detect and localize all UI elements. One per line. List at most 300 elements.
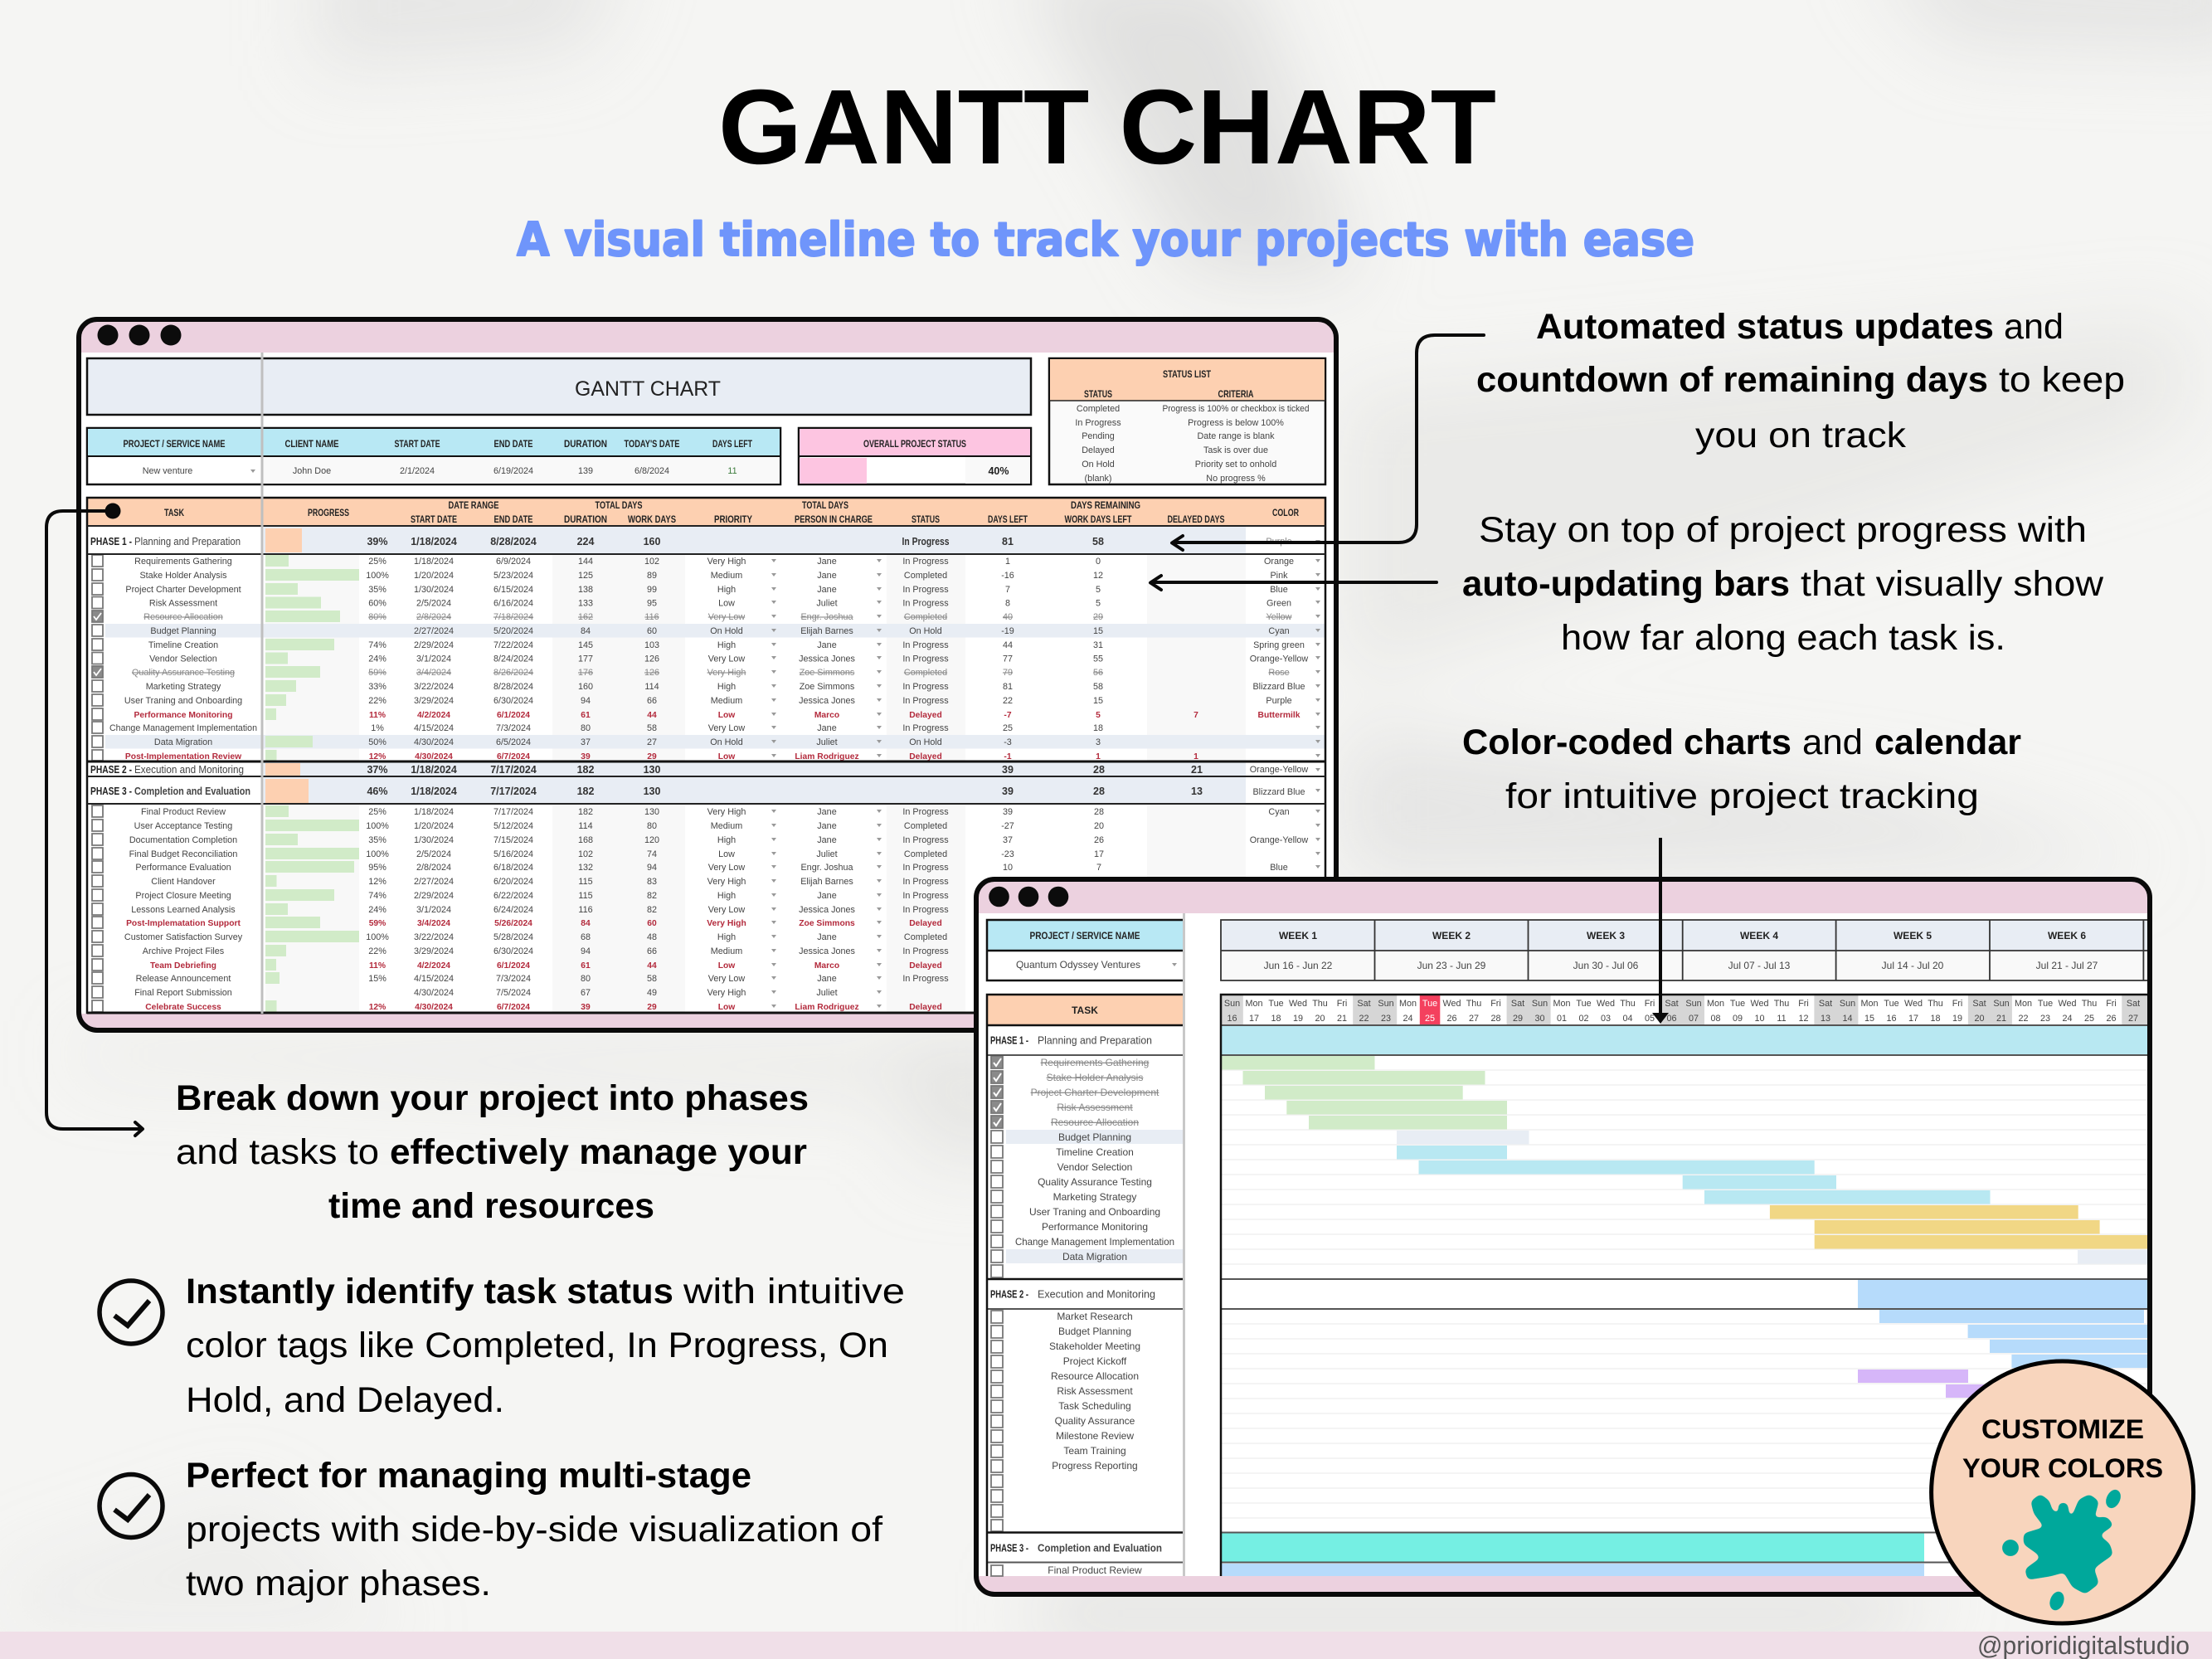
phase 1 task rows: 7/3/2024 — [496, 723, 531, 733]
phase 1 task rows: 103 — [644, 640, 659, 650]
day calendar header: Fri — [1490, 999, 1501, 1009]
phase 3 task rows: 100% — [366, 849, 389, 859]
phase 1 task rows: 50% — [368, 737, 386, 747]
phase 1 task rows: 100% — [366, 571, 389, 581]
table header row: DAYS REMAINING — [1071, 501, 1140, 511]
task list: Final Product Review — [1048, 1564, 1142, 1576]
text block: phases callout: Break down your project into phases — [176, 1078, 809, 1118]
phase 1 task rows: 22 — [1003, 696, 1013, 706]
phase 1 task rows: 27 — [647, 737, 657, 747]
day calendar header: 07 — [1689, 1014, 1699, 1024]
day calendar header: 20 — [1974, 1014, 1985, 1024]
week headers: WEEK 5 — [1894, 930, 1932, 941]
text block: color coded callout — [1462, 722, 2021, 816]
status list legend: Pending — [1082, 431, 1115, 441]
phase 2 summary row — [90, 762, 1308, 776]
day calendar header: Tue — [1422, 999, 1437, 1009]
day calendar header: Wed — [1442, 999, 1461, 1009]
day calendar header: 06 — [1666, 1014, 1677, 1024]
badge: customize your colors: YOUR COLORS — [1962, 1453, 2163, 1483]
phase 1 task rows: 114 — [644, 682, 659, 692]
project name box — [987, 920, 1183, 980]
phase 3 task rows: Final Report Submission — [134, 988, 232, 998]
phase 1 task rows: 4/15/2024 — [414, 723, 454, 733]
phase 1 task rows: Very Low — [708, 723, 745, 733]
phase 3 task rows: Release Announcement — [136, 974, 231, 984]
phase 3 task rows: 114 — [578, 821, 593, 831]
phase 3 task rows: 6/30/2024 — [493, 946, 533, 956]
phase 1 task rows: Low — [718, 599, 735, 609]
phase 1 task rows: 1 — [1005, 557, 1010, 567]
phase 3 task rows: Jane — [817, 821, 837, 831]
phase 1 task rows: Vendor Selection — [149, 654, 217, 664]
phase 1 task rows: Zoe Simmons — [800, 668, 855, 678]
day calendar header: 11 — [1777, 1014, 1787, 1024]
status list legend: In Progress — [1075, 418, 1121, 428]
day calendar header: Wed — [2058, 999, 2077, 1009]
phase 1 task rows: 1% — [371, 723, 384, 733]
phase 3 task rows: In Progress — [902, 974, 949, 984]
table header row: DATE RANGE — [448, 501, 499, 511]
phase 3 task rows: Jane — [817, 807, 837, 817]
phase 3 task rows: 1/20/2024 — [414, 821, 454, 831]
phase 3 task rows: 94 — [647, 863, 657, 873]
day calendar header: 29 — [1513, 1014, 1523, 1024]
phase 3 task rows: 66 — [647, 946, 657, 956]
text block: phases callout: time and resources — [328, 1186, 654, 1226]
phase 1 task rows: 84 — [581, 626, 591, 636]
phase 3 task rows: 6/22/2024 — [493, 891, 533, 901]
phase 3 task rows: 100% — [366, 932, 389, 942]
phase 1 task rows: 126 — [644, 668, 659, 678]
text block: color coded callout: for intuitive project tracking — [1505, 776, 1979, 816]
phase 2 summary row: 130 — [644, 764, 660, 776]
phase 3 task rows: Jane — [817, 891, 837, 901]
phase 3 task rows: Final Budget Reconciliation — [129, 849, 237, 859]
phase 3 task rows: Very High — [707, 877, 746, 887]
phase 3 task rows: Final Product Review — [141, 807, 226, 817]
day calendar header: 17 — [1249, 1014, 1259, 1024]
phase 1 task rows: 1/30/2024 — [414, 585, 454, 595]
phase 1 task rows: In Progress — [902, 682, 949, 692]
status list legend: STATUS — [1084, 390, 1112, 400]
phase 1 task rows: 6/1/2024 — [497, 711, 530, 720]
phase 1 task rows: 126 — [644, 654, 659, 664]
phase 1 task rows: Engr. Joshua — [800, 612, 853, 622]
phase 3 task rows: In Progress — [902, 835, 949, 845]
table header row: WORK DAYS — [628, 515, 676, 525]
timeline section rules — [1221, 1025, 2148, 1563]
phase 1 summary row: Planning and Preparation — [134, 536, 241, 547]
project info table: START DATE — [395, 440, 440, 450]
phase 1 task rows: 60% — [368, 599, 386, 609]
table header row: DAYS LEFT — [988, 515, 1028, 525]
text block: task status bullet: Instantly identify task status — [186, 1272, 673, 1311]
phase 1 task rows: 40 — [1003, 612, 1013, 622]
dropdown arrows — [771, 559, 1320, 1008]
status list legend: On Hold — [1082, 460, 1115, 469]
day calendar header: 18 — [1930, 1014, 1941, 1024]
table column shading — [265, 554, 1246, 1013]
day calendar header: Mon — [1245, 999, 1263, 1009]
phase 2 summary row: 182 — [577, 764, 594, 776]
phase 3 task rows: 4/30/2024 — [414, 988, 454, 998]
phase 3 task rows: Engr. Joshua — [800, 863, 853, 873]
phase 1 task rows: 3/29/2024 — [414, 696, 454, 706]
phase 1 task rows: Delayed — [909, 752, 942, 761]
phase 1 task rows: Low — [718, 711, 736, 720]
phase 1 task rows: 6/15/2024 — [493, 585, 533, 595]
phase 3 task rows: 2/27/2024 — [414, 877, 454, 887]
phase 1 summary row: 39% — [367, 536, 388, 547]
text block: progress bars callout — [1462, 510, 2104, 658]
phase 3 task rows: Lessons Learned Analysis — [131, 905, 236, 915]
phase 3 task rows: 115 — [578, 877, 593, 887]
task list: Planning and Preparation — [1038, 1034, 1152, 1047]
week headers: WEEK 2 — [1432, 930, 1471, 941]
phase 1 task rows: Jane — [817, 640, 837, 650]
phase 3 task rows: 115 — [578, 891, 593, 901]
day calendar header: 19 — [1293, 1014, 1303, 1024]
week headers: Jun 16 - Jun 22 — [1264, 960, 1333, 971]
phase 1 task rows: 94 — [581, 696, 591, 706]
phase 3 task rows: Project Closure Meeting — [135, 891, 231, 901]
task list: TASK — [1072, 1005, 1098, 1016]
phase 1 gantt bars — [1222, 1056, 2148, 1264]
phase 3 task rows: 44 — [647, 961, 657, 971]
text block: progress bars callout: Stay on top of project progress with — [1479, 510, 2087, 550]
phase 3 task rows: In Progress — [902, 905, 949, 915]
day calendar header: Sun — [1532, 999, 1548, 1009]
phase 1 task rows: 2/8/2024 — [416, 612, 451, 622]
phase 3 task rows: 102 — [578, 849, 593, 859]
phase 1 task rows: 5 — [1096, 585, 1101, 595]
week headers — [1221, 920, 2148, 980]
phase 2 summary row: PHASE 2 - — [90, 764, 132, 776]
phase 3 task rows: Delayed — [909, 961, 942, 971]
phase 1 task rows: Requirements Gathering — [134, 557, 232, 567]
phase 3 task rows: Archive Project Files — [143, 946, 225, 956]
phase 1 task rows: High — [717, 682, 736, 692]
phase 3 task rows: Cyan — [1268, 807, 1290, 817]
phase 3 task rows: Very Low — [708, 863, 745, 873]
phase 1 task rows: 0 — [1096, 557, 1101, 567]
phase 3 task rows: 12% — [369, 1003, 386, 1012]
phase 3 summary row: Completion and Evaluation — [134, 786, 250, 797]
project info table: 6/19/2024 — [493, 466, 533, 476]
day calendar header: Wed — [1904, 999, 1923, 1009]
phase 2 gantt bars — [1858, 1279, 2148, 1398]
day calendar header: 27 — [1469, 1014, 1479, 1024]
week headers: Jul 21 - Jul 27 — [2036, 960, 2098, 971]
phase 1 task rows — [105, 555, 1325, 761]
day calendar header: 15 — [1864, 1014, 1874, 1024]
phase 1 task rows: -16 — [1001, 571, 1014, 581]
phase 3 task rows: Completed — [904, 849, 947, 859]
project info table: DURATION — [564, 440, 607, 450]
phase 3 task rows: Very Low — [708, 905, 745, 915]
day calendar header: 16 — [1227, 1014, 1237, 1024]
phase 3 task rows: 95% — [368, 863, 386, 873]
table header row: DURATION — [564, 515, 607, 525]
phase 3 task rows: 2/29/2024 — [414, 891, 454, 901]
text block: task status bullet: Hold, and Delayed. — [186, 1380, 504, 1420]
sheet title box: GANTT CHART — [575, 377, 721, 401]
phase 3 task rows: High — [717, 932, 736, 942]
window frame outline — [79, 319, 1336, 1030]
task list: Execution and Monitoring — [1038, 1287, 1155, 1301]
phase 1 task rows: 6/5/2024 — [496, 737, 531, 747]
phase 3 task rows: 2/8/2024 — [416, 863, 451, 873]
phase 3 task rows: 37 — [1003, 835, 1013, 845]
project info table: 2/1/2024 — [400, 466, 435, 476]
phase 3 task rows: 3/22/2024 — [414, 932, 454, 942]
week headers: WEEK 1 — [1279, 930, 1317, 941]
status list legend: Task is over due — [1203, 445, 1268, 455]
status list legend: Date range is blank — [1197, 431, 1275, 441]
project info table: DAYS LEFT — [712, 440, 752, 450]
arrow: phases callout to task column — [46, 503, 143, 1136]
task list: Risk Assessment — [1057, 1385, 1133, 1397]
phase 3 task rows: 39 — [581, 1003, 591, 1012]
phase 1 task rows: 58 — [647, 723, 657, 733]
phase 3 task rows: 82 — [647, 905, 657, 915]
text block: task status bullet: with intuitive — [683, 1272, 905, 1311]
task list: Team Training — [1063, 1445, 1126, 1457]
phase 3 task rows: Blue — [1270, 863, 1288, 873]
phase 3 task rows: Jessica Jones — [799, 946, 856, 956]
phase 1 task rows: In Progress — [902, 557, 949, 567]
phase 1 task rows: 177 — [578, 654, 593, 664]
phase 3 task rows: 74% — [368, 891, 386, 901]
phase 1 task rows: Cyan — [1268, 626, 1290, 636]
phase 3 task rows: 2/5/2024 — [416, 849, 451, 859]
phase 3 task rows: User Acceptance Testing — [134, 821, 232, 831]
text block: multi-stage bullet: Perfect for managing multi-stage — [186, 1456, 751, 1496]
phase 1 task rows: Orange — [1264, 557, 1294, 567]
phase 1 task rows: 24% — [368, 654, 386, 664]
phase 1 task rows: User Traning and Onboarding — [124, 696, 242, 706]
phase 1 task rows: Marco — [814, 711, 839, 720]
phase 1 task rows: 2/27/2024 — [414, 626, 454, 636]
status list legend: (blank) — [1084, 474, 1112, 484]
phase 1 task rows: 6/16/2024 — [493, 599, 533, 609]
phase 3 task rows: In Progress — [902, 946, 949, 956]
arrow: calendar callout to day header — [1652, 838, 1669, 1024]
phase 1 task rows: 3/4/2024 — [416, 668, 451, 678]
gantt timeline row lines — [1221, 1070, 2148, 1518]
phase 1 task rows: Resource Allocation — [143, 612, 223, 622]
phase 1 task rows: 61 — [581, 711, 591, 720]
day calendar header: Fri — [1337, 999, 1347, 1009]
freeze pane divider — [1183, 913, 1185, 1576]
phase 1 summary row: Purple — [1266, 537, 1292, 547]
phase 3 task rows: Juliet — [816, 988, 838, 998]
week headers: Jul 14 - Jul 20 — [1882, 960, 1944, 971]
phase 3 task rows: 11% — [369, 961, 386, 971]
text block: phases callout: effectively manage your — [390, 1132, 807, 1172]
phase 1 task rows: Low — [718, 752, 736, 761]
phase 1 task rows: Medium — [711, 571, 742, 581]
day calendar header: 19 — [1952, 1014, 1962, 1024]
phase 3 task rows: Post-Implematation Support — [126, 919, 241, 928]
phase 1 summary row: 160 — [644, 536, 660, 547]
task list: Task Scheduling — [1058, 1400, 1131, 1412]
phase 3 task rows: Orange-Yellow — [1250, 835, 1308, 845]
phase 1 task rows: 1/18/2024 — [414, 557, 454, 567]
phase 2 summary row: 28 — [1093, 764, 1105, 776]
phase 1 task rows: Quality Assurance Testing — [132, 668, 235, 678]
phase 3 task rows: 7/5/2024 — [496, 988, 531, 998]
day calendar header: 25 — [2084, 1014, 2094, 1024]
day calendar header: 12 — [1798, 1014, 1809, 1024]
freeze pane divider — [260, 353, 264, 1014]
phase 1 task rows: 138 — [578, 585, 593, 595]
day calendar header: 24 — [1403, 1014, 1413, 1024]
phase 3 gantt bars — [1221, 1533, 1924, 1576]
phase 1 task rows: 7/22/2024 — [493, 640, 533, 650]
phase 3 task rows: Jane — [817, 932, 837, 942]
phase 3 task rows: 12% — [368, 877, 386, 887]
phase 1 task rows: 162 — [578, 612, 593, 622]
overall project status — [799, 428, 1031, 484]
phase 1 task rows: 116 — [644, 612, 659, 622]
phase 2 summary row: Orange-Yellow — [1250, 765, 1308, 775]
phase 3 task rows: 80 — [581, 974, 591, 984]
task list: Project Kickoff — [1063, 1355, 1127, 1367]
day calendar header: Wed — [1750, 999, 1769, 1009]
phase 1 task rows: Very High — [707, 557, 746, 567]
phase 1 task rows: 29 — [1093, 612, 1103, 622]
phase 3 task rows: 7/17/2024 — [493, 807, 533, 817]
text block: automated status callout: you on track — [1695, 416, 1907, 455]
day calendar header: 25 — [1425, 1014, 1435, 1024]
status list legend: Progress is below 100% — [1188, 418, 1284, 428]
badge: customize your colors: CUSTOMIZE — [1981, 1414, 2144, 1444]
phase 3 task rows: 6/7/2024 — [497, 1003, 530, 1012]
task list: Milestone Review — [1056, 1430, 1134, 1442]
phase 1 task rows: In Progress — [902, 723, 949, 733]
phase 3 task rows: 28 — [1094, 807, 1104, 817]
phase 3 task rows: Jane — [817, 974, 837, 984]
phase 1 task rows: 95 — [647, 599, 657, 609]
day calendar header: Fri — [1645, 999, 1655, 1009]
phase 3 task rows: 3/29/2024 — [414, 946, 454, 956]
phase 3 task rows: 3/1/2024 — [416, 905, 451, 915]
task list: Data Migration — [1062, 1251, 1127, 1262]
text block: progress bars callout: how far along each task is. — [1561, 618, 2005, 658]
phase 1 task rows: Zoe Simmons — [800, 682, 855, 692]
phase 1 task rows: Performance Monitoring — [134, 711, 232, 720]
phase 3 summary row: 46% — [367, 786, 388, 797]
task list: Resource Allocation — [1051, 1117, 1139, 1128]
day calendar header: Thu — [1620, 999, 1636, 1009]
table header row: TOTAL DAYS — [802, 501, 848, 511]
day calendar header: 21 — [1337, 1014, 1347, 1024]
table header row: TASK — [164, 508, 185, 518]
table header row: STATUS — [912, 515, 940, 525]
phase 3 task rows: In Progress — [902, 877, 949, 887]
phase 3 task rows: 68 — [581, 932, 591, 942]
phase 3 task rows: Completed — [904, 932, 947, 942]
phase 1 task rows: 80% — [368, 612, 386, 622]
phase 3 task rows: 48 — [647, 932, 657, 942]
day calendar header — [1221, 995, 2148, 1025]
day calendar header: Mon — [1553, 999, 1571, 1009]
phase 1 task rows: 1 — [1096, 752, 1101, 761]
phase 3 task rows: 1/18/2024 — [414, 807, 454, 817]
day calendar header: Mon — [1399, 999, 1417, 1009]
phase 1 task rows: 31 — [1093, 640, 1103, 650]
phase 1 task rows: Jane — [817, 585, 837, 595]
phase 1 task rows: Yellow — [1266, 612, 1292, 622]
day calendar header: Thu — [1774, 999, 1789, 1009]
title: GANTT CHART — [718, 68, 1496, 187]
day calendar header: Fri — [2106, 999, 2117, 1009]
phase 1 task rows: 3/22/2024 — [414, 682, 454, 692]
phase 2 summary row: 39 — [1002, 764, 1014, 776]
task list: Stake Holder Analysis — [1047, 1072, 1143, 1083]
phase 1 task rows: Pink — [1270, 571, 1288, 581]
phase 1 task rows: 1/20/2024 — [414, 571, 454, 581]
phase 1 task rows: 58 — [1093, 682, 1103, 692]
phase 1 task rows: 35% — [368, 585, 386, 595]
day calendar header: Thu — [1466, 999, 1481, 1009]
day calendar header: Sun — [1840, 999, 1855, 1009]
text block: progress bars callout: that visually show — [1801, 564, 2104, 604]
phase 1 task rows: 25% — [368, 557, 386, 567]
day calendar header: Thu — [2082, 999, 2097, 1009]
week headers: WEEK 6 — [2048, 930, 2086, 941]
day calendar header: Tue — [1884, 999, 1899, 1009]
phase 1 task rows: 7/18/2024 — [493, 612, 533, 622]
icon: paint splat — [2002, 1487, 2123, 1613]
week headers: Jul 07 - Jul 13 — [1728, 960, 1791, 971]
day calendar header: 22 — [2018, 1014, 2029, 1024]
phase 3 task rows: Marco — [814, 961, 839, 971]
phase 3 task rows: Medium — [711, 821, 742, 831]
text block: multi-stage bullet — [186, 1456, 883, 1603]
task list: Timeline Creation — [1056, 1146, 1134, 1158]
phase 1 task rows: 4/30/2024 — [415, 752, 453, 761]
week headers: WEEK 3 — [1587, 930, 1625, 941]
phase 1 task rows: Buttermilk — [1258, 711, 1300, 720]
icon: check circle 2 — [100, 1475, 163, 1538]
task list: Budget Planning — [1058, 1131, 1131, 1143]
phase 1 task rows: 12 — [1093, 571, 1103, 581]
phase 1 task rows: Change Management Implementation — [109, 723, 257, 733]
text block: automated status callout: and — [2004, 307, 2064, 347]
project name box: PROJECT / SERVICE NAME — [1030, 930, 1140, 941]
phase 1 task rows: Orange-Yellow — [1250, 654, 1308, 664]
phase 1 task rows: 160 — [578, 682, 593, 692]
phase 3 summary row: 182 — [577, 786, 594, 797]
day calendar header: Sun — [1224, 999, 1240, 1009]
phase 2 summary row: 37% — [367, 764, 388, 776]
phase 1 task rows: 145 — [578, 640, 593, 650]
week headers: WEEK 4 — [1740, 930, 1778, 941]
day calendar header: Sat — [1972, 999, 1986, 1009]
day calendar header: 16 — [1886, 1014, 1897, 1024]
phase 3 task rows: Juliet — [816, 849, 838, 859]
panel: calendar gantt mockup — [974, 877, 2152, 1597]
table header row — [87, 498, 1325, 526]
phase 1 task rows: Jessica Jones — [799, 654, 856, 664]
phase 1 task rows: 15 — [1093, 626, 1103, 636]
phase 3 task rows: 6/20/2024 — [493, 877, 533, 887]
phase 3 task rows — [124, 805, 1308, 1012]
phase 1 task rows: 11% — [369, 711, 386, 720]
